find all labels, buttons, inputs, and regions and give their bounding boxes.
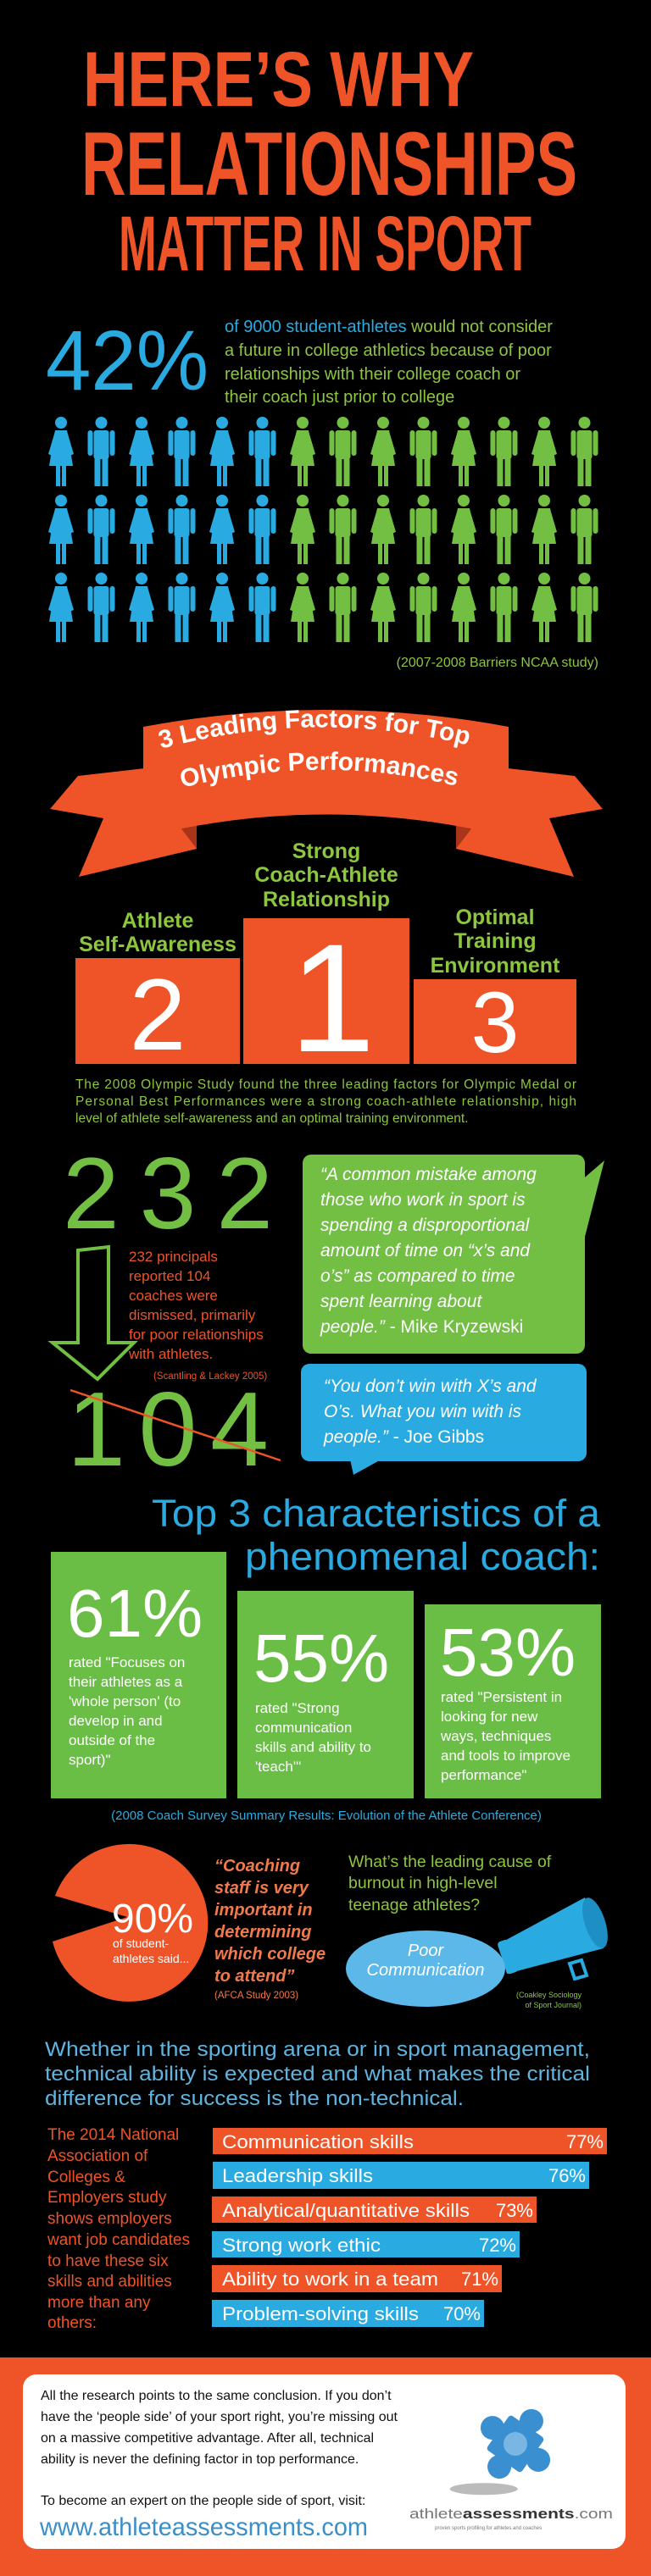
source: coach survey: (2008 Coach Survey Summary Results: Evolution of the Athlete Conference) — [111, 1809, 542, 1823]
ribbon banner: Olympic Performances — [181, 751, 458, 786]
card: 53%: ways, techniques — [440, 1728, 551, 1744]
stat: 42% — [46, 313, 553, 408]
source: NCAA: (2007-2008 Barriers NCAA study) — [397, 656, 598, 670]
olympic study paragraph: The 2008 Olympic Study found the three leading factors for Olympic Medal or — [75, 1077, 576, 1092]
stat: 42%: 42% — [46, 313, 209, 408]
quote: coaching staff: to attend” — [214, 1967, 294, 1986]
burnout question: What’s the leading cause of — [348, 1853, 552, 1871]
card: 53% — [425, 1604, 601, 1798]
card: 61%: rated "Focuses on — [69, 1654, 185, 1670]
conclusion text: on a massive competitive advantage. After all, technical — [41, 2431, 374, 2446]
podium: Environment — [431, 954, 560, 978]
principals text: reported 104 — [129, 1268, 210, 1284]
card: 55% — [237, 1591, 414, 1798]
quote bubble: Kryzewski: spent learning about — [320, 1292, 482, 1311]
NACE study text: want job candidates — [47, 2231, 190, 2249]
conclusion text — [41, 2389, 398, 2508]
card: 53%: rated "Persistent in — [441, 1689, 562, 1705]
quote bubble: Kryzewski: amount of time on “x’s and — [320, 1241, 531, 1260]
stat: 42%: of 9000 student-athletes would not consider — [225, 318, 553, 336]
heading: top 3 characteristics: phenomenal coach: — [245, 1535, 600, 1578]
stat: 42%: a future in college athletics because of poor — [225, 341, 552, 360]
podium: Athlete — [122, 909, 193, 933]
NACE study text: Employers study — [47, 2189, 167, 2207]
quote bubble: Gibbs: O’s. What you win with is — [324, 1402, 522, 1421]
source: Coakley: (Coakley Sociology — [516, 1991, 581, 1999]
card: 61%: 'whole person' (to — [69, 1693, 181, 1709]
burnout question — [348, 1853, 552, 1914]
podium: Training — [453, 929, 537, 953]
bubble: poor communication: Communication — [367, 1961, 484, 1980]
stat: 232: 232 — [63, 1137, 273, 1250]
olympic study paragraph — [75, 1077, 576, 1126]
logo text: athlete assessments .com — [409, 2506, 613, 2522]
quote bubble: Kryzewski: “A common mistake among — [320, 1165, 537, 1184]
podium: 3 — [471, 974, 519, 1071]
card: 55%: communication — [255, 1720, 352, 1736]
card: 53%: and tools to improve — [441, 1748, 570, 1764]
statement paragraph: Whether in the sporting arena or in sport management, — [45, 2038, 590, 2061]
footer panel: proven sports profiling for athletes and coaches — [435, 2526, 542, 2531]
principals text: (Scantling & Lackey 2005) — [153, 1371, 267, 1382]
source: Coakley — [516, 1991, 581, 2009]
card: 61%: develop in and — [69, 1713, 163, 1729]
principals text: coaches were — [129, 1288, 218, 1304]
card: 53%: 53% — [440, 1615, 576, 1690]
burnout question: teenage athletes? — [348, 1896, 480, 1914]
quote bubble: Gibbs — [301, 1364, 587, 1475]
principals text: for poor relationships — [129, 1327, 264, 1343]
footer panel — [0, 2357, 651, 2576]
card: 55%: rated "Strong — [255, 1700, 340, 1716]
quote bubble: Gibbs: people.” - Joe Gibbs — [323, 1427, 484, 1447]
quote: coaching staff: determining — [214, 1923, 311, 1942]
bar chart: skills: 72% — [479, 2235, 516, 2256]
quote bubble: Kryzewski: spending a disproportional — [320, 1216, 531, 1235]
bar chart: skills: 77% — [566, 2131, 604, 2152]
heading: top 3 characteristics: Top 3 characteristics of a — [152, 1492, 601, 1535]
podium: Optimal — [455, 906, 535, 929]
conclusion text: All the research points to the same conclusion. If you don’t — [41, 2389, 392, 2403]
card: 61%: outside of the — [69, 1732, 155, 1748]
conclusion text: have the ‘people side’ of your sport right, you’re missing out — [41, 2410, 398, 2424]
quote bubble: Kryzewski: o’s” as compared to time — [320, 1266, 515, 1286]
principals text: dismissed, primarily — [129, 1307, 256, 1323]
bar chart: skills: 76% — [548, 2165, 586, 2186]
principals text — [128, 1249, 267, 1382]
quote bubble: Gibbs: “You don’t win with X’s and — [324, 1377, 537, 1396]
principals text: 232 principals — [129, 1249, 218, 1265]
NACE study text — [47, 2126, 190, 2332]
quote bubble: Kryzewski: people.” - Mike Kryzewski — [320, 1317, 523, 1337]
podium: 2 — [130, 958, 186, 1072]
NACE study text: to have these six — [47, 2252, 169, 2270]
card: 61%: sport)" — [69, 1752, 110, 1768]
NACE study text: others: — [47, 2314, 97, 2332]
olympic study paragraph: level of athlete self-awareness and an optimal training environment. — [75, 1111, 469, 1126]
quote: coaching staff: staff is very — [214, 1879, 309, 1897]
NACE study text: The 2014 National — [47, 2126, 179, 2144]
bar chart: skills — [212, 2128, 607, 2327]
bar chart: skills: Communication skills — [222, 2131, 414, 2152]
card: 55%: 'teach'" — [255, 1759, 301, 1775]
bubble: poor communication — [346, 1931, 505, 2007]
quote bubble: Kryzewski — [303, 1155, 604, 1354]
url: www.athleteassessments.com — [39, 2513, 368, 2541]
quote: coaching staff: (AFCA Study 2003) — [214, 1991, 298, 2001]
pie: 90%: of student- — [113, 1936, 169, 1950]
quote: coaching staff: which college — [214, 1945, 326, 1964]
podium — [75, 839, 576, 1084]
bar chart: skills: Leadership skills — [222, 2165, 373, 2186]
card: 61%: their athletes as a — [69, 1674, 183, 1690]
bar chart: skills: Analytical/quantitative skills — [222, 2200, 470, 2221]
quote: coaching staff — [214, 1857, 326, 2001]
title — [81, 36, 577, 287]
NACE study text: Association of — [47, 2147, 148, 2165]
burnout question: burnout in high-level — [348, 1874, 498, 1892]
NACE study text: Colleges & — [47, 2169, 125, 2186]
podium: Self-Awareness — [79, 933, 236, 956]
ribbon banner — [50, 710, 603, 877]
bar chart: skills: Strong work ethic — [222, 2235, 381, 2256]
bubble: poor communication: Poor — [408, 1942, 444, 1960]
pie: 90%: athletes said... — [113, 1952, 189, 1965]
podium: Relationship — [263, 888, 390, 911]
heading: top 3 characteristics — [152, 1492, 601, 1578]
stat: 104 with strike: 104 — [67, 1371, 269, 1488]
stat: 42%: relationships with their college coach or — [225, 365, 520, 384]
title: HERE’S WHY — [83, 36, 474, 123]
bar chart: skills: 71% — [461, 2269, 498, 2290]
card: 61% — [51, 1552, 226, 1798]
card: 53%: looking for new — [441, 1709, 538, 1725]
bar chart: skills: 70% — [443, 2303, 481, 2324]
card: 53%: performance" — [441, 1767, 526, 1783]
podium: Strong — [292, 839, 360, 863]
olympic study paragraph: Personal Best Performances were a strong coach-athlete relationship, high — [75, 1094, 576, 1109]
podium: 1 — [289, 911, 376, 1084]
bar chart: skills: Problem-solving skills — [222, 2303, 419, 2324]
quote: coaching staff: important in — [214, 1901, 313, 1920]
bar chart: skills: Ability to work in a team — [222, 2269, 438, 2290]
NACE study text: shows employers — [47, 2210, 172, 2228]
ribbon banner: 3 Leading Factors for Top — [159, 710, 470, 748]
statement paragraph: difference for success is the non-technical. — [45, 2087, 464, 2110]
podium: Coach-Athlete — [254, 863, 398, 887]
NACE study text: more than any — [47, 2294, 151, 2312]
quote: coaching staff: “Coaching — [214, 1857, 300, 1875]
arrow down — [53, 1247, 134, 1379]
pie: 90%: 90% — [112, 1897, 193, 1942]
conclusion text: ability is never the defining factor in top performance. — [41, 2452, 359, 2467]
statement paragraph: technical ability is expected and what makes the critical — [45, 2063, 590, 2086]
statement paragraph — [45, 2038, 590, 2110]
pictogram: 42 figures — [48, 417, 598, 642]
source: Coakley: of Sport Journal) — [525, 2001, 581, 2009]
NACE study text: skills and abilities — [47, 2273, 172, 2291]
card: 55%: 55% — [253, 1620, 389, 1696]
principals text: with athletes. — [128, 1346, 213, 1362]
pie: 90% — [53, 1844, 208, 2002]
icon: puzzle piece — [437, 2389, 570, 2532]
bar chart: skills: 73% — [496, 2200, 533, 2221]
card: 55%: skills and ability to — [255, 1739, 371, 1755]
icon: megaphone — [497, 1895, 613, 1979]
conclusion text: To become an expert on the people side of sport, visit: — [41, 2494, 365, 2508]
card: 61%: 61% — [67, 1576, 203, 1651]
quote bubble: Kryzewski: those who work in sport is — [320, 1190, 526, 1210]
stat: 42%: their coach just prior to college — [225, 388, 454, 407]
